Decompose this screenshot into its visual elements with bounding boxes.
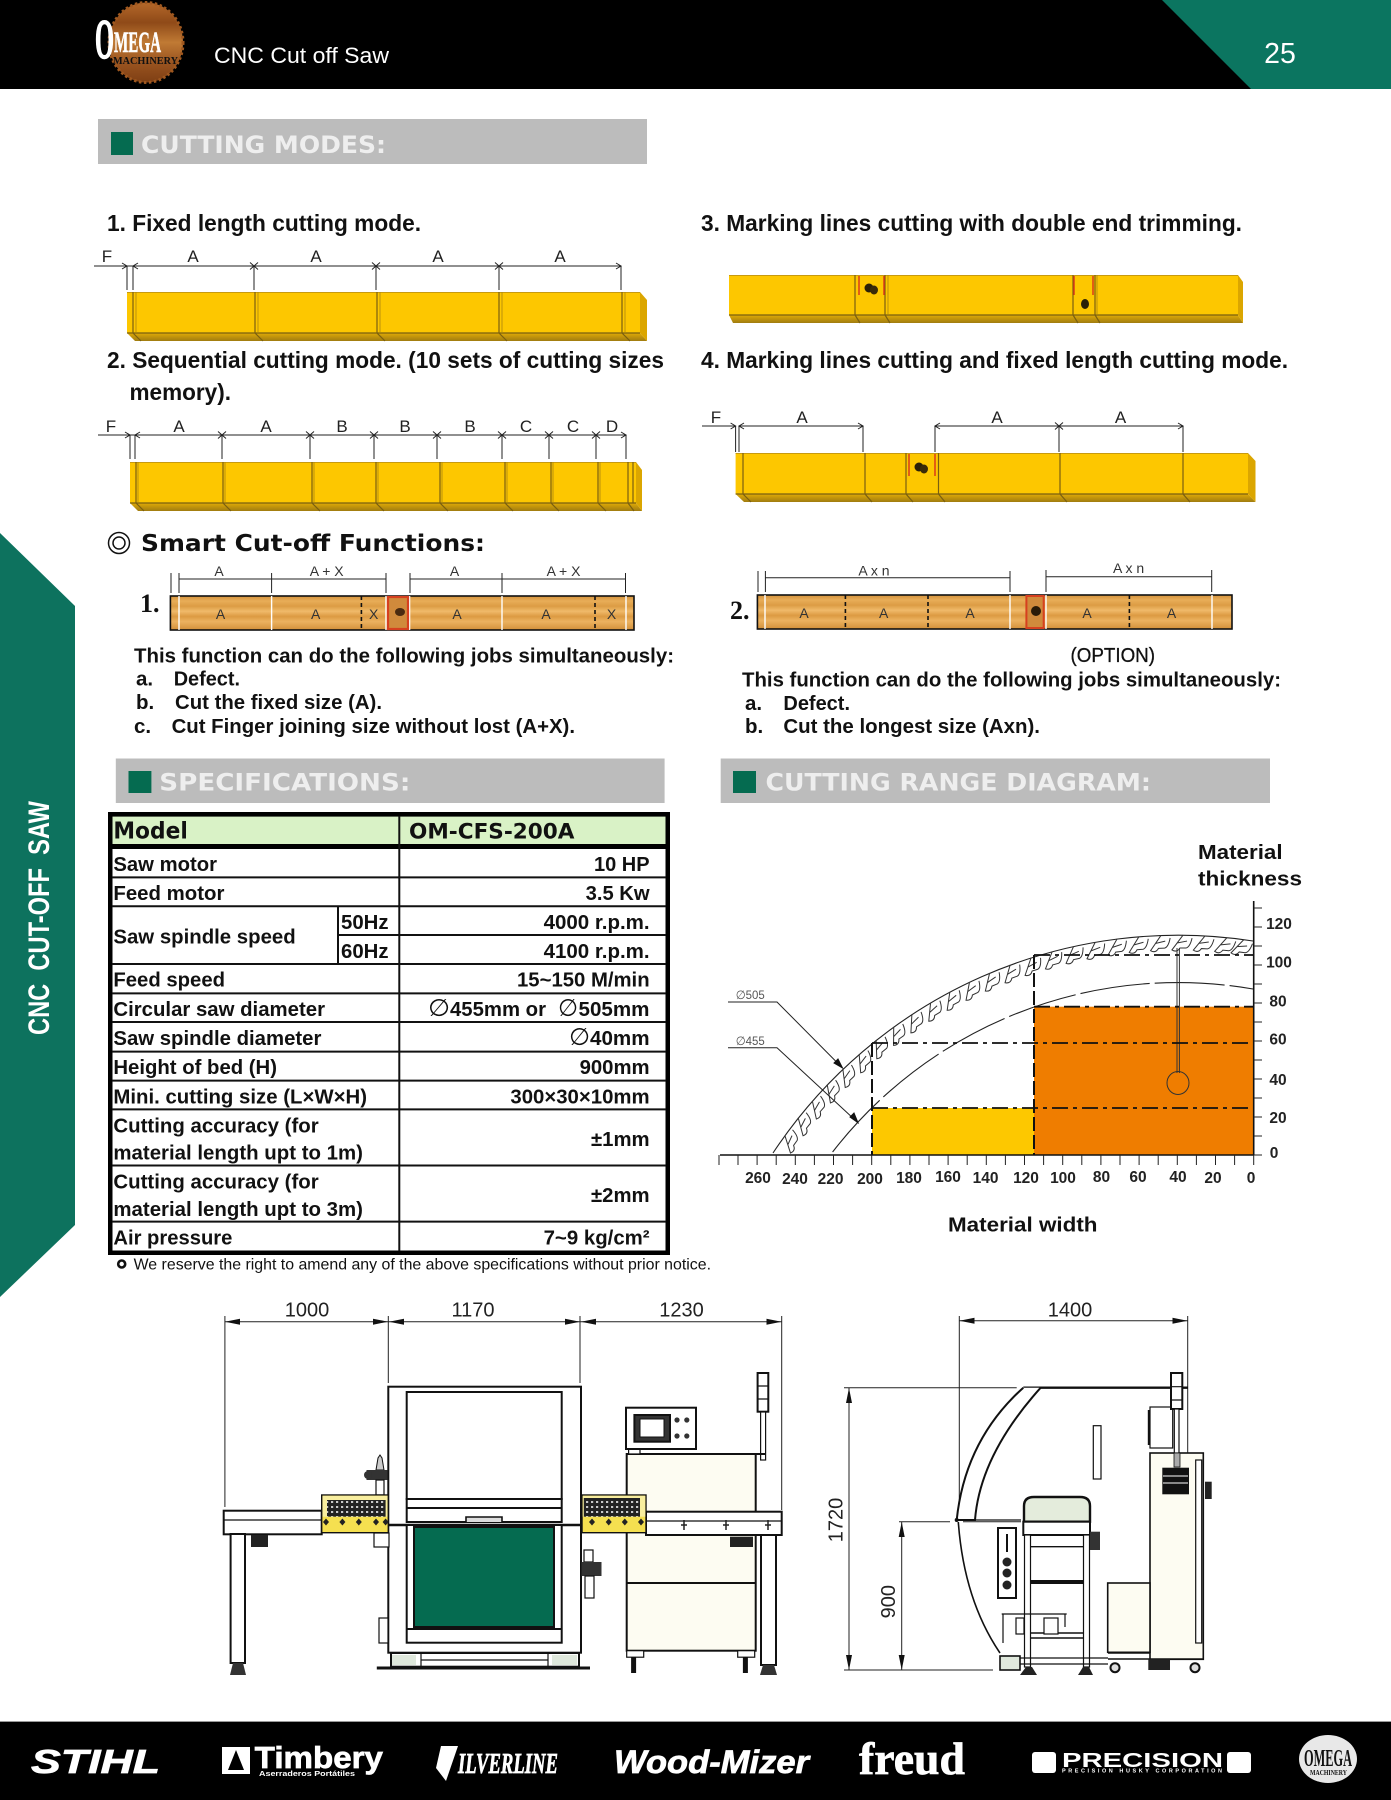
mode 1 heading: 1. Fixed length cutting mode. [107,210,421,236]
right air filter [582,1550,602,1598]
mode 2 diagram: D [606,417,618,436]
smart function 1 board: A [541,606,551,622]
table rows: Feed motor [113,883,225,905]
heading bar: cutting modes: CUTTING MODES: [141,131,386,159]
smart function 1 board: X [369,606,379,622]
table rows: 60Hz [341,941,389,963]
table header row [112,817,666,845]
mode 2 heading: memory). [130,379,231,405]
smart function 1 text: Cut the fixed size (A). [175,691,382,714]
side elevation dimensions: 1400 [1048,1300,1092,1322]
table rows: 505mm [578,999,650,1021]
smart function 2 board: 2. [730,596,750,625]
smart function 2 board: A [879,605,889,621]
y axis labels: 0 [1270,1145,1278,1162]
table rows: ∅ [569,1023,590,1051]
smart function 1 board: A [452,606,462,622]
header title: CNC Cut off Saw [214,43,389,68]
logo: Stihl: STIHL [31,1743,160,1780]
x axis labels: 60 [1129,1169,1147,1186]
smart function 1 board: A [214,563,224,579]
footnote: We reserve the right to amend any of the above specifications without prior notice. [134,1257,711,1274]
x axis labels: 20 [1204,1170,1222,1187]
heading bar: specifications: SPECIFICATIONS: [159,769,410,797]
table rows: material length upt to 1m) [113,1143,363,1165]
heading bar: cutting range diagram [721,758,1270,803]
lower assembly [1000,1614,1067,1670]
table rows: 10 HP [594,854,650,876]
front elevation dimensions [225,1300,782,1510]
side elevation dimensions: 900 [878,1585,900,1618]
smart function 2 text [742,645,1281,738]
mode 3 diagram [729,275,1243,323]
axes [720,901,1254,1155]
smart function 1 text: This function can do the following jobs simultaneously: [134,645,674,668]
y axis labels [1266,916,1292,1162]
x axis labels: 180 [896,1170,922,1187]
smart function 2 text: This function can do the following jobs simultaneously: [742,669,1281,692]
smart function 1 board: A [450,563,460,579]
mode 3 heading: 3. Marking lines cutting with double end trimming. [701,210,1242,236]
smart function 2 text: Defect. [783,692,850,715]
x axis title: Material width [948,1214,1098,1237]
saw blade arcs [773,935,1253,1154]
x axis labels: 0 [1247,1170,1255,1187]
logo: Omega: MACHINERY [1310,1769,1347,1777]
mode 4 diagram: A [1115,408,1127,427]
mode 1 diagram: F [102,247,112,266]
heading bar: cutting range diagram: CUTTING RANGE DIAGRAM: [766,769,1151,797]
heading bar: specifications [116,758,665,803]
table rows: 900mm [580,1057,650,1079]
table rows: Saw spindle speed [113,926,296,948]
smart function 1 board: A + X [310,563,344,579]
cutting range chart [719,841,1302,1237]
front elevation dimensions: 1000 [285,1300,329,1322]
blade diameter callouts: ∅505 [736,988,765,1002]
table rows: ±1mm [591,1129,650,1151]
x axis labels: 160 [935,1169,961,1186]
smart function 2 text: b. [745,715,763,738]
orange range [1034,1007,1253,1155]
logo: Timbery: Aserraderos Portátiles [259,1771,355,1778]
mode 1 diagram: A [432,247,444,266]
table rows: 15~150 M/min [517,970,650,992]
x axis labels: 200 [857,1171,883,1188]
y axis labels: 40 [1269,1072,1287,1089]
smart function 1 text: b. [136,691,154,714]
smart cut-off heading: Smart Cut-off Functions: [141,529,485,557]
logo: Omega Machinery saw blade [95,2,183,82]
smart function 2 board: A [1167,605,1177,621]
table rows: Cutting accuracy (for [113,1115,319,1137]
side control strip [998,1528,1016,1598]
mode 1 diagram: A [554,247,566,266]
y axis title: thickness [1198,868,1302,891]
smart function 2 text: (OPTION) [1070,645,1155,667]
mode 2 diagram: C [567,417,579,436]
mode 2 heading [107,347,664,405]
logo: Omega Machinery saw blade: MEGA [114,26,161,59]
logo: Precision [1032,1750,1251,1774]
x axis labels: 120 [1013,1170,1039,1187]
x axis labels: 140 [973,1170,999,1187]
page number: 25 [1264,38,1296,70]
x axis labels: 80 [1093,1169,1110,1186]
mode 2 diagram: A [260,417,272,436]
side elevation dimensions: 1720 [826,1498,848,1542]
cabinet side [1108,1373,1212,1672]
table rows: 7~9 kg/cm² [544,1228,650,1250]
main frame [377,1387,590,1668]
front elevation dimensions: 1230 [659,1300,704,1322]
logo: Omega Machinery saw blade: O [95,9,114,71]
x axis labels: 260 [745,1170,771,1187]
smart function 1 text: Cut Finger joining size without lost (A+X). [172,715,575,738]
mode 2 diagram: F [106,417,116,436]
smart function 1 board: 1. [140,589,160,618]
y axis title: Material [1198,841,1283,864]
control panel [626,1408,696,1449]
table rows: ±2mm [591,1185,650,1207]
mode 4 diagram: A [991,408,1003,427]
left yellow feeder [322,1495,389,1533]
table rows: material length upt to 3m) [113,1199,363,1221]
blade diameter callouts [728,988,858,1123]
green door panel [414,1527,554,1627]
y axis labels: 80 [1269,994,1287,1010]
smart function 1 board: X [607,606,617,622]
x axis labels [745,1169,1255,1188]
logo: Timbery [222,1740,384,1778]
mode 2 diagram [98,417,642,511]
smart function 1 text: a. [136,668,153,691]
x axis labels: 220 [818,1171,844,1188]
table rows: ∅ [558,994,578,1022]
y axis labels: 100 [1266,954,1292,972]
right outfeed table [646,1512,782,1675]
logo: Silverline: ILVERLINE [457,1749,558,1780]
logo: Freud: freud [859,1733,965,1784]
table rows: Feed speed [113,970,225,992]
y axis labels: 20 [1269,1110,1287,1127]
table rows [113,854,650,1250]
specifications table [108,812,670,1255]
smart function 2 board: A x n [1113,560,1144,576]
smart function 2 text: Cut the longest size (Axn). [783,715,1040,738]
y axis labels: 60 [1269,1032,1287,1048]
yellow range [872,1108,1034,1155]
logo: Precision: PRECISION HUSKY CORPORATION [1062,1768,1222,1774]
mode 4 heading: 4. Marking lines cutting and fixed length cutting mode. [701,347,1288,373]
logo: Omega [1299,1735,1357,1783]
x axis labels: 100 [1050,1170,1076,1187]
mode 2 diagram: A [173,417,185,436]
smart function 1 text: Defect. [174,668,240,691]
mode 1 diagram: A [310,247,322,266]
table rows: Saw spindle diameter [113,1028,322,1050]
signal tower [756,1373,768,1460]
front elevation dimensions: 1170 [451,1300,495,1322]
table rows: Mini. cutting size (L×W×H) [113,1086,367,1108]
mode 2 heading: 2. Sequential cutting mode. (10 sets of cutting sizes [107,347,664,373]
smart function 2 text: a. [745,692,762,715]
mode 4 diagram [702,408,1256,502]
table rows: 300×30×10mm [510,1086,650,1108]
mode 4 diagram: F [711,408,721,427]
smart function 2 board [730,560,1232,629]
logo: Wood-Mizer: Wood-Mizer [614,1744,811,1780]
smart function 1 text: c. [134,715,151,738]
defects [864,284,1089,309]
side tab: CNC cut-off saw: CNC CUT-OFF SAW [23,800,56,1035]
front elevation machine drawing [224,1373,782,1675]
smart function 1 board [140,563,634,630]
mode 1 diagram: A [187,247,199,266]
header band [0,0,1391,89]
smart function 1 board: A [311,606,321,622]
table rows: 455mm or [450,999,546,1021]
side elevation dimensions [826,1300,1188,1670]
page number tab [1162,0,1391,89]
mode 1 diagram [94,247,647,341]
mode 2 diagram: B [399,417,411,436]
table rows: Circular saw diameter [113,999,325,1021]
table rows: 4100 r.p.m. [544,941,650,963]
smart function 1 board: A + X [547,563,581,579]
x axis labels: 240 [782,1171,808,1188]
y axis title [1198,841,1302,891]
smart function 2 board: A [965,605,975,621]
table rows: 4000 r.p.m. [544,912,650,934]
y axis labels: 120 [1266,916,1292,933]
table rows: Cutting accuracy (for [113,1172,319,1194]
left air unit [364,1455,389,1547]
table rows: ∅ [428,994,450,1022]
table rows: 40mm [590,1028,650,1050]
smart function 2 board: A x n [858,563,890,579]
footer band [0,1721,1391,1800]
smart function 2 board: A [1082,605,1092,621]
mode 2 diagram: C [520,417,532,436]
table rows: Air pressure [113,1228,232,1250]
defect [914,462,928,474]
mode 2 diagram: B [336,417,348,436]
smart function 1 board: A [216,606,226,622]
logo: Omega Machinery saw blade: MACHINERY [113,56,179,67]
table header row: OM-CFS-200A [409,820,575,844]
side elevation machine drawing [955,1373,1212,1675]
table rows: Height of bed (H) [113,1057,277,1079]
saw hood [955,1388,1188,1653]
table rows: 3.5 Kw [586,883,650,905]
cabinet [627,1449,756,1673]
smart function 1 text [134,645,674,738]
table rows: Saw motor [113,854,217,876]
x axis labels: 40 [1169,1169,1187,1186]
right yellow feeder [582,1495,646,1533]
logo: Precision: PRECISION [1062,1750,1223,1772]
table header row: Model [113,819,188,845]
table rows: 50Hz [341,912,389,934]
blade diameter callouts: ∅455 [736,1034,765,1048]
heading bar: cutting modes [98,119,647,164]
logo: Timbery: Timbery [255,1740,384,1775]
logo: Silverline [436,1746,558,1781]
side tab: CNC cut-off saw [0,533,75,1297]
left infeed table [224,1511,322,1675]
mode 4 diagram: A [796,408,808,427]
feed unit stand [1000,1497,1108,1675]
smart function 2 board: A [799,605,809,621]
mode 2 diagram: B [464,417,476,436]
